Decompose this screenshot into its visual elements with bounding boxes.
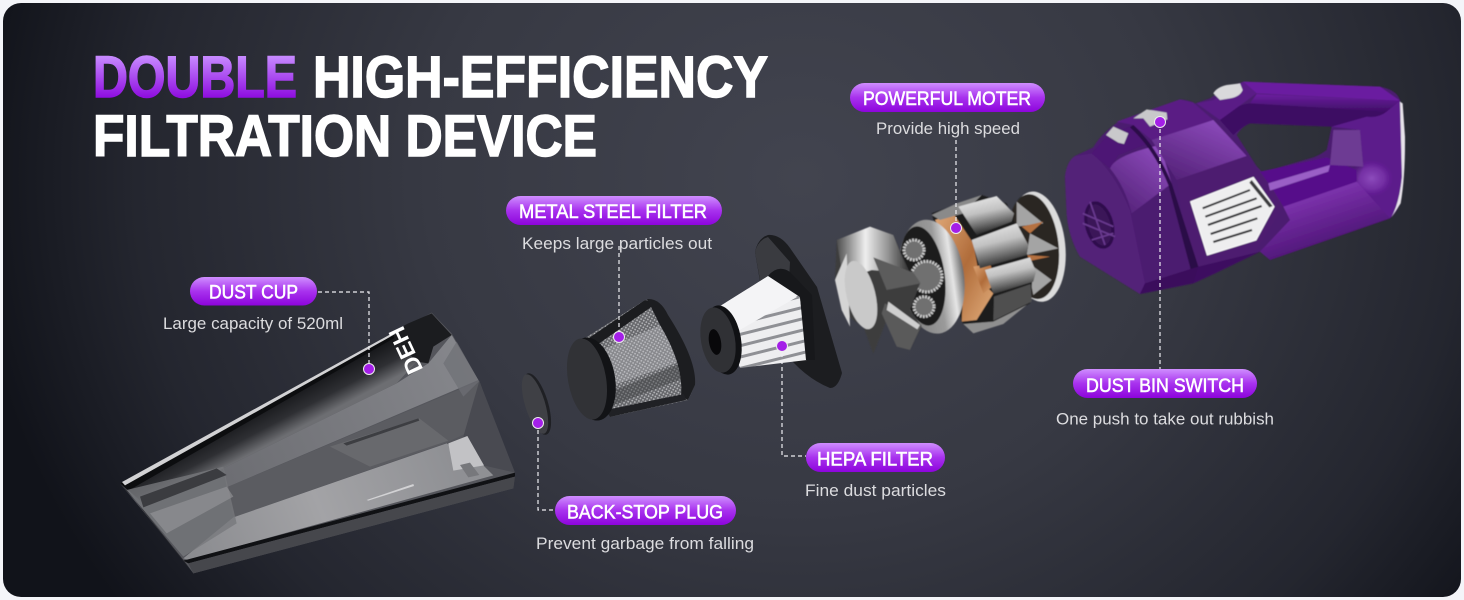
top buttons xyxy=(1213,83,1243,100)
marker: metal steel filter xyxy=(614,332,624,342)
leader line: HEPA filter xyxy=(782,346,806,456)
callout: back-stop plug: Prevent garbage from falling xyxy=(536,535,754,553)
illustration: HEPA filter xyxy=(696,235,842,388)
callout: back-stop plug xyxy=(536,496,754,553)
callout: dust cup: DUST CUP xyxy=(209,282,298,304)
illustration: metal steel filter xyxy=(561,299,695,424)
title words: HIGH-EFFICIENCY: HIGH-EFFICIENCY xyxy=(313,45,768,110)
callout: dust bin switch xyxy=(1056,369,1274,428)
leader line: metal steel filter xyxy=(618,246,620,337)
marker: HEPA filter xyxy=(776,340,788,352)
callout: dust cup xyxy=(163,277,343,333)
leader line: motor xyxy=(955,140,957,228)
upper handle xyxy=(1243,82,1400,101)
callout: dust bin switch: One push to take out rubbish xyxy=(1056,410,1274,428)
callout: powerful motor: Provide high speed xyxy=(876,120,1020,138)
rear handle xyxy=(1332,101,1405,218)
illustration: back-stop plug xyxy=(516,370,557,438)
callout: HEPA filter: Fine dust particles xyxy=(805,482,946,500)
stator base xyxy=(932,195,1033,333)
copper windings xyxy=(935,213,993,322)
title word: DOUBLE: DOUBLE xyxy=(93,45,297,110)
illustration: vacuum main body xyxy=(1065,82,1405,294)
callout: powerful motor xyxy=(850,83,1045,138)
lower handle bar xyxy=(1260,182,1390,260)
title line 2: FILTRATION DEVICE xyxy=(93,104,597,169)
leader line: dust cup xyxy=(318,292,369,369)
cup logo: DEH xyxy=(383,323,428,378)
callout: metal steel filter xyxy=(506,196,722,253)
callout: metal steel filter: METAL STEEL FILTER xyxy=(519,201,707,223)
front vent xyxy=(1081,200,1117,250)
callout: powerful motor: POWERFUL MOTER xyxy=(863,88,1031,110)
leader line: dust bin switch xyxy=(1159,122,1161,369)
callout: dust bin switch: DUST BIN SWITCH xyxy=(1086,375,1244,397)
callout: metal steel filter: Keeps large particles out xyxy=(522,235,712,253)
leader line: back-stop plug xyxy=(538,423,555,510)
title xyxy=(93,45,768,169)
front face xyxy=(1065,153,1145,294)
callout: dust cup: Large capacity of 520ml xyxy=(163,315,343,333)
marker: back-stop plug xyxy=(532,418,544,428)
stator blocks xyxy=(932,195,982,220)
rear fan xyxy=(1004,189,1071,305)
marker: dust cup xyxy=(364,364,374,374)
marker: dust bin switch xyxy=(1154,116,1166,128)
gear ring xyxy=(892,215,972,338)
callout: back-stop plug: BACK-STOP PLUG xyxy=(567,502,723,524)
callout: HEPA filter: HEPA FILTER xyxy=(817,448,933,470)
marker: motor xyxy=(950,222,962,234)
callout: HEPA filter xyxy=(805,443,946,500)
illustration: dust cup xyxy=(120,313,515,573)
front fan xyxy=(835,227,922,354)
illustration: motor xyxy=(835,189,1071,354)
side grille plate xyxy=(1191,177,1274,255)
